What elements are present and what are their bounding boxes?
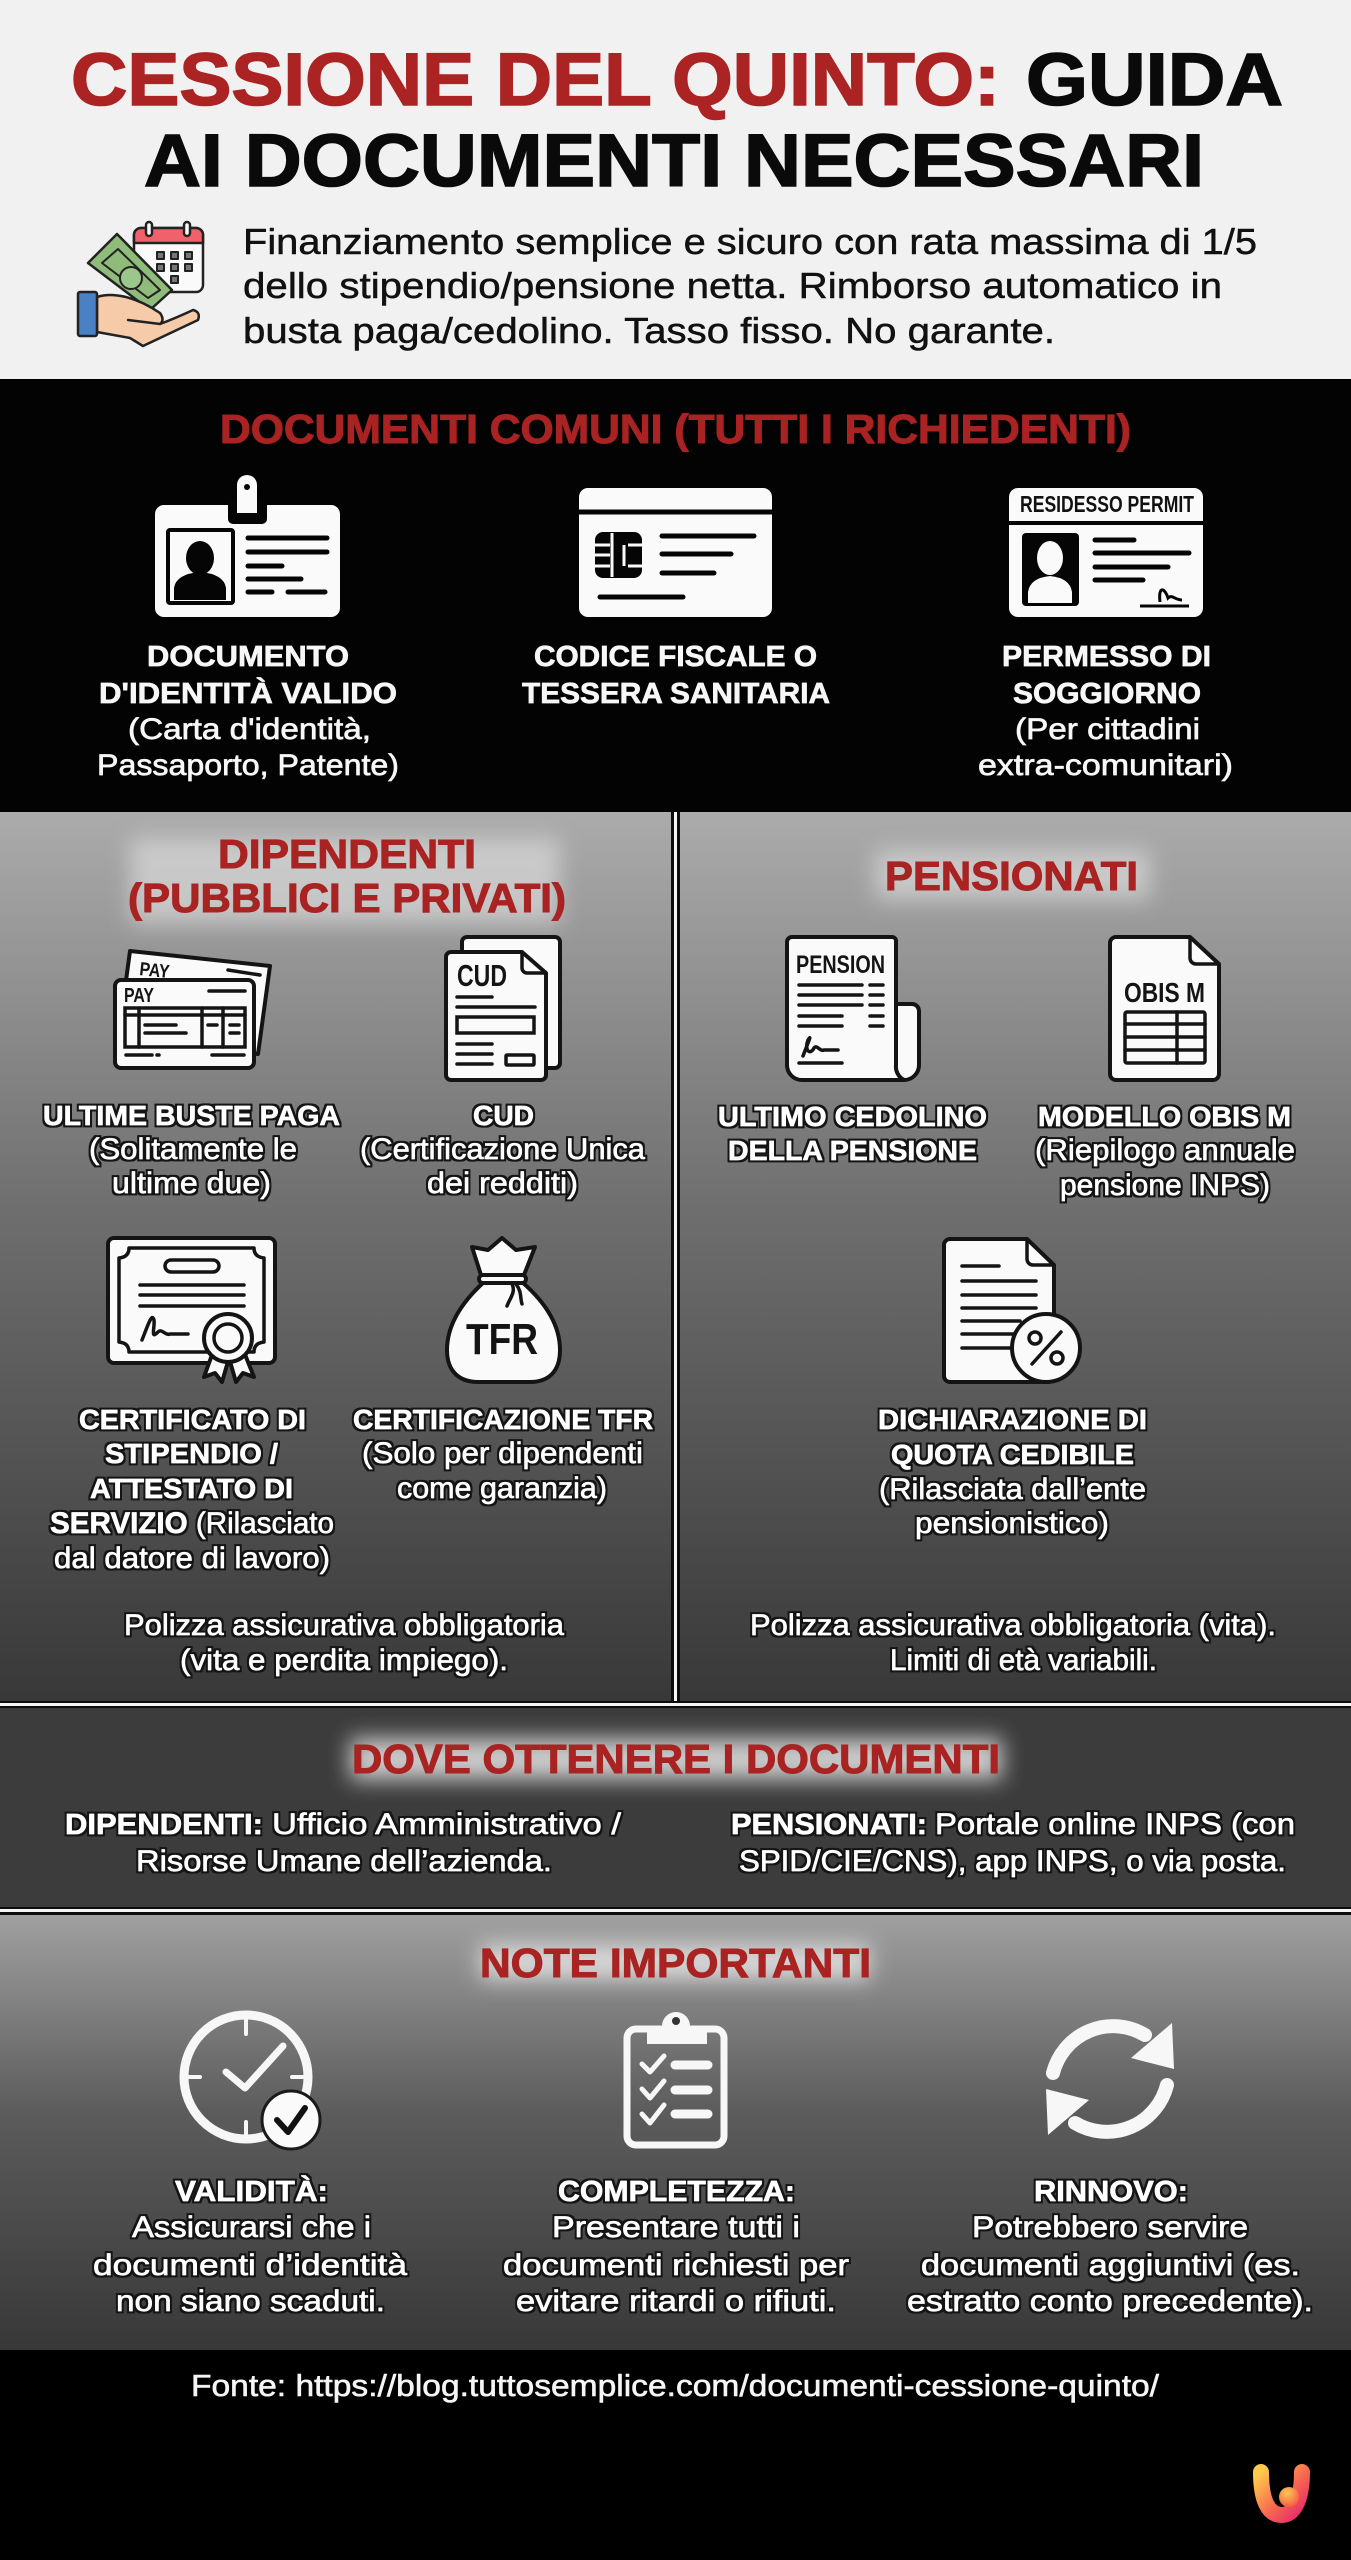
heading: dove ottenere: DOVE OTTENERE I DOCUMENTI: [352, 1736, 1000, 1782]
label: dichiarazione quota cedibile: QUOTA CEDIBILE: [891, 1439, 1134, 1470]
text: dove pensionati: SPID/CIE/CNS), app INPS, o via posta.: [739, 1845, 1286, 1878]
text: dove dipendenti: Risorse Umane dell’azienda.: [136, 1845, 552, 1878]
text: dove pensionati: Portale online INPS (con: [935, 1808, 1295, 1841]
heading: documenti comuni: DOCUMENTI COMUNI (TUTTI I RICHIEDENTI): [220, 406, 1131, 452]
icon: orologio con spunta: [184, 2015, 320, 2149]
icon: cedolino pensione: [787, 937, 919, 1080]
label: documento d'identita: (Carta d'identità,: [128, 713, 371, 746]
label: codice fiscale: CODICE FISCALE O: [534, 641, 817, 673]
label: dichiarazione quota cedibile: (Rilasciata dall’ente: [879, 1473, 1146, 1506]
label: certificazione tfr: come garanzia): [397, 1472, 607, 1505]
label: documento d'identita: [97, 641, 399, 782]
label: permesso di soggiorno: (Per cittadini: [1015, 713, 1200, 746]
label: modello obis m: MODELLO OBIS M: [1038, 1101, 1291, 1132]
icon: cud: CUD: [457, 958, 507, 993]
panel: dove ottenere i documenti: [0, 1708, 1351, 1907]
label: cud: [360, 1100, 645, 1200]
label: documento d'identita: D'IDENTITÀ VALIDO: [99, 676, 397, 710]
label: ultimo cedolino: DELLA PENSIONE: [728, 1135, 977, 1166]
heading: pensionati: PENSIONATI: [885, 853, 1138, 899]
label: completezza: COMPLETEZZA:: [558, 2176, 795, 2208]
label: dichiarazione quota cedibile: DICHIARAZIONE DI: [878, 1404, 1147, 1435]
label: certificato di stipendio: dal datore di lavoro): [54, 1542, 330, 1575]
label: rinnovo: [907, 2176, 1313, 2318]
label: validita: documenti d’identità: [93, 2249, 407, 2282]
label: permesso di soggiorno: SOGGIORNO: [1013, 678, 1201, 710]
panel: header: [0, 0, 1351, 379]
icon: permesso di soggiorno: [1009, 488, 1203, 617]
icon: permesso di soggiorno: RESIDESSO PERMIT: [1020, 491, 1194, 517]
label: permesso di soggiorno: extra-comunitari): [978, 749, 1233, 782]
text: polizza pensionati: [750, 1609, 1276, 1677]
label: modello obis m: pensione INPS): [1060, 1169, 1270, 1202]
icon: id badge: [155, 475, 340, 617]
label: dichiarazione quota cedibile: [878, 1404, 1147, 1540]
label: dichiarazione quota cedibile: pensionistico): [915, 1507, 1109, 1540]
icon: sacco tfr: TFR: [466, 1315, 538, 1364]
label: certificazione tfr: (Solo per dipendenti: [362, 1437, 643, 1470]
label: codice fiscale: [522, 641, 830, 710]
text: polizza dipendenti: (vita e perdita impiego).: [180, 1644, 508, 1677]
heading: note importanti: NOTE IMPORTANTI: [480, 1940, 871, 1986]
label: ultimo cedolino: [718, 1101, 987, 1166]
text: dove dipendenti: [65, 1808, 622, 1878]
panel: footer: [0, 2350, 1351, 2560]
panel: dipendenti: [0, 812, 672, 1702]
label: permesso di soggiorno: PERMESSO DI: [1002, 641, 1211, 673]
heading: dipendenti: DIPENDENTI: [218, 831, 476, 877]
text: polizza dipendenti: [124, 1609, 564, 1677]
intro text: dello stipendio/pensione netta. Rimborso automatico in: [243, 265, 1222, 306]
label: completezza: evitare ritardi o rifiuti.: [516, 2285, 836, 2318]
label: rinnovo: documenti aggiuntivi (es.: [921, 2249, 1300, 2282]
label: cud: dei redditi): [427, 1167, 578, 1200]
panel: documenti comuni: [0, 379, 1351, 813]
panel: pensionati: [680, 812, 1351, 1702]
label: ultimo cedolino: ULTIMO CEDOLINO: [718, 1101, 987, 1132]
icon: obis m: OBIS M: [1124, 977, 1205, 1008]
title: CESSIONE DEL QUINTO:: [71, 38, 1000, 121]
icon: frecce rinnovo: [1046, 2023, 1174, 2135]
icon: quota cedibile: [944, 1239, 1080, 1382]
label: modello obis m: (Riepilogo annuale: [1035, 1134, 1295, 1167]
label: documento d'identita: Passaporto, Patente): [97, 749, 399, 782]
icon: buste paga: PAY: [124, 985, 155, 1007]
label: permesso di soggiorno: [978, 641, 1233, 782]
label: completezza: Presentare tutti i: [552, 2211, 800, 2244]
label: certificato di stipendio: ATTESTATO DI: [90, 1473, 293, 1504]
icon: logo: [1261, 2472, 1302, 2515]
label: documento d'identita: DOCUMENTO: [147, 641, 349, 673]
panel: note importanti: [0, 1915, 1351, 2350]
title: [71, 38, 1283, 202]
icon: certificato: [108, 1238, 275, 1382]
title: GUIDA: [1026, 38, 1283, 121]
text: fonte: Fonte: https://blog.tuttosemplice.com/documenti-cessione-quinto/: [191, 2368, 1159, 2403]
icon: buste paga: PAY: [138, 959, 171, 983]
label: validita: [93, 2174, 407, 2318]
icon: buste paga: [115, 951, 270, 1068]
intro text: Finanziamento semplice e sicuro con rata massima di 1/5: [243, 221, 1257, 262]
icon: hand with money and calendar: [78, 222, 203, 346]
label: ultime buste paga: [43, 1100, 340, 1200]
label: validita: VALIDITÀ:: [175, 2174, 328, 2208]
label: certificato di stipendio: STIPENDIO /: [105, 1438, 278, 1469]
text: polizza dipendenti: Polizza assicurativa obbligatoria: [124, 1609, 564, 1642]
label: certificazione tfr: [353, 1404, 653, 1505]
text: dove pensionati: [731, 1808, 1295, 1878]
label: modello obis m: [1035, 1101, 1295, 1202]
label: ultime buste paga: (Solitamente le: [89, 1133, 297, 1166]
text: dove dipendenti: DIPENDENTI:: [65, 1809, 263, 1841]
text: dove dipendenti: Ufficio Amministrativo /: [272, 1808, 622, 1841]
label: rinnovo: estratto conto precedente).: [907, 2285, 1313, 2318]
label: certificazione tfr: CERTIFICAZIONE TFR: [353, 1404, 653, 1435]
label: codice fiscale: TESSERA SANITARIA: [522, 678, 830, 710]
label: completezza: documenti richiesti per: [503, 2249, 849, 2282]
text: polizza pensionati: Limiti di età variabili.: [890, 1644, 1157, 1677]
label: rinnovo: RINNOVO:: [1034, 2176, 1188, 2208]
icon: clipboard: [627, 2012, 724, 2145]
label: ultime buste paga: ultime due): [112, 1167, 271, 1200]
label: certificato di stipendio: SERVIZIO (Rilasciato: [50, 1507, 334, 1540]
intro text: [243, 221, 1257, 351]
heading: dipendenti: [128, 831, 566, 921]
text: dove pensionati: PENSIONATI:: [731, 1809, 927, 1841]
label: ultime buste paga: ULTIME BUSTE PAGA: [43, 1100, 340, 1131]
heading: dipendenti: (PUBBLICI E PRIVATI): [128, 875, 566, 921]
label: rinnovo: Potrebbero servire: [972, 2211, 1248, 2244]
icon: cedolino pensione: PENSION: [796, 951, 885, 979]
label: cud: (Certificazione Unica: [360, 1133, 645, 1166]
icon: sacco tfr: [447, 1238, 560, 1382]
intro text: busta paga/cedolino. Tasso fisso. No garante.: [243, 310, 1055, 351]
icon: obis m: [1110, 937, 1219, 1080]
icon: cud: [446, 937, 560, 1080]
label: validita: Assicurarsi che i: [132, 2211, 371, 2244]
label: certificato di stipendio: CERTIFICATO DI: [79, 1404, 306, 1435]
text: polizza pensionati: Polizza assicurativa obbligatoria (vita).: [750, 1609, 1276, 1642]
label: cud: CUD: [473, 1100, 534, 1131]
icon: tessera sanitaria: [579, 488, 772, 617]
label: validita: non siano scaduti.: [116, 2285, 385, 2318]
label: certificato di stipendio: [50, 1404, 334, 1575]
label: completezza: [503, 2176, 849, 2318]
title: AI DOCUMENTI NECESSARI: [144, 119, 1204, 202]
